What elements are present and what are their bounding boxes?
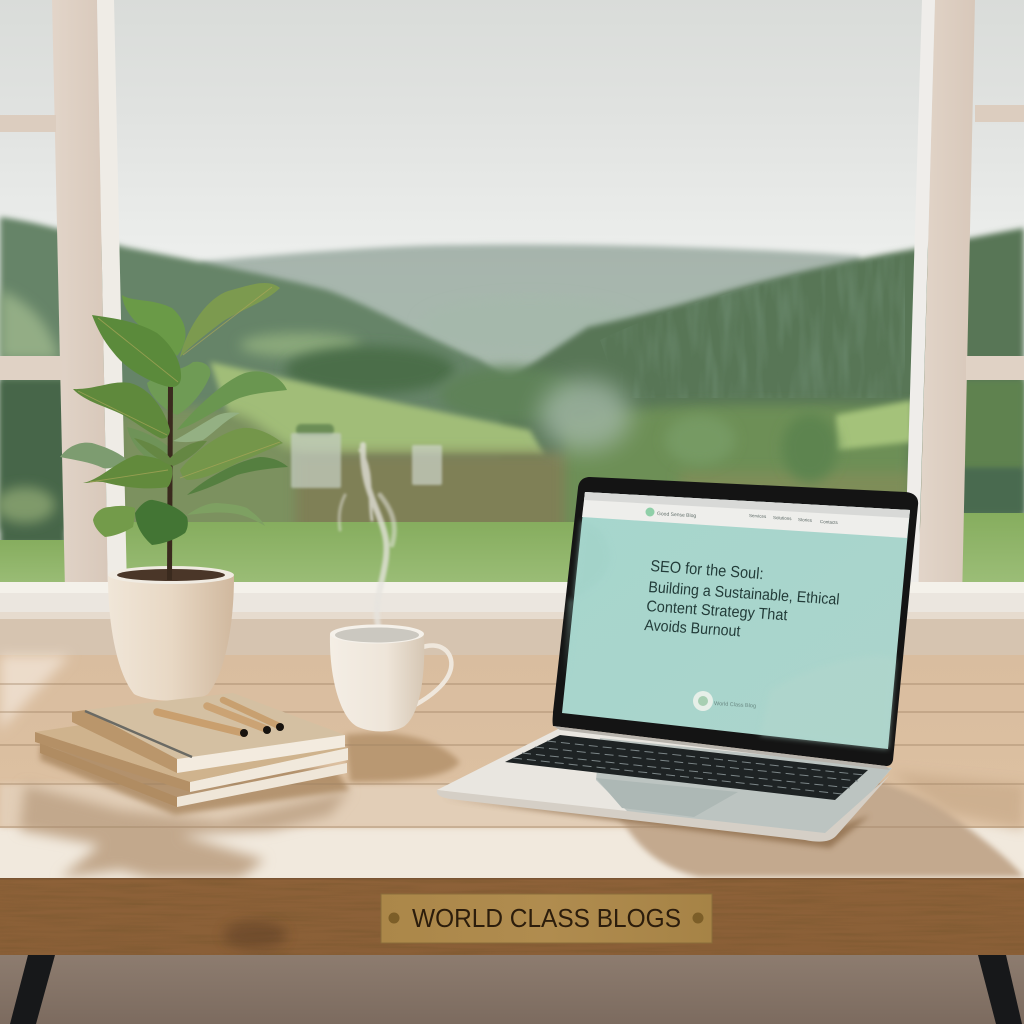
brass name plate: WORLD CLASS BLOGS <box>412 903 681 933</box>
brass name plate <box>381 894 712 943</box>
website header bar: Solutions <box>773 515 792 521</box>
plant pot <box>108 566 234 701</box>
top notebook <box>72 693 345 773</box>
website header bar: Stories <box>798 517 813 523</box>
potted fiddle-leaf plant <box>60 283 288 701</box>
steam <box>339 445 394 625</box>
laptop base <box>437 728 892 842</box>
laptop lid <box>553 477 918 770</box>
website header bar: Good Sense Blog <box>657 511 696 519</box>
screen footer logo <box>693 691 756 711</box>
plant leaves and stem <box>60 283 288 580</box>
laptop <box>437 477 918 842</box>
screen footer logo: World Class Blog <box>714 701 756 710</box>
three pens <box>157 700 284 737</box>
bottom notebook <box>40 743 347 807</box>
website header bar <box>582 492 910 538</box>
table legs <box>10 955 1022 1024</box>
website header bar: Services <box>749 513 767 519</box>
glass reflections <box>291 424 442 488</box>
screen title text: Content Strategy That <box>646 598 789 624</box>
coffee mug <box>330 624 451 732</box>
screen title text: SEO for the Soul: <box>650 557 764 583</box>
laptop shadow <box>600 780 1024 877</box>
screen title text <box>644 557 840 640</box>
outdoor landscape view <box>0 0 1024 600</box>
stack of notebooks <box>35 693 348 807</box>
plant shadow on table <box>20 785 350 878</box>
wall beneath the table <box>0 955 1024 1024</box>
laptop screen <box>562 492 910 749</box>
middle notebook <box>35 722 348 792</box>
screen title text: Avoids Burnout <box>644 617 742 640</box>
table front edge <box>0 878 1024 955</box>
wooden table top <box>0 655 1024 881</box>
screen title text: Building a Sustainable, Ethical <box>648 579 840 609</box>
window frame <box>0 0 1024 656</box>
website header bar: Contacts <box>820 519 838 525</box>
